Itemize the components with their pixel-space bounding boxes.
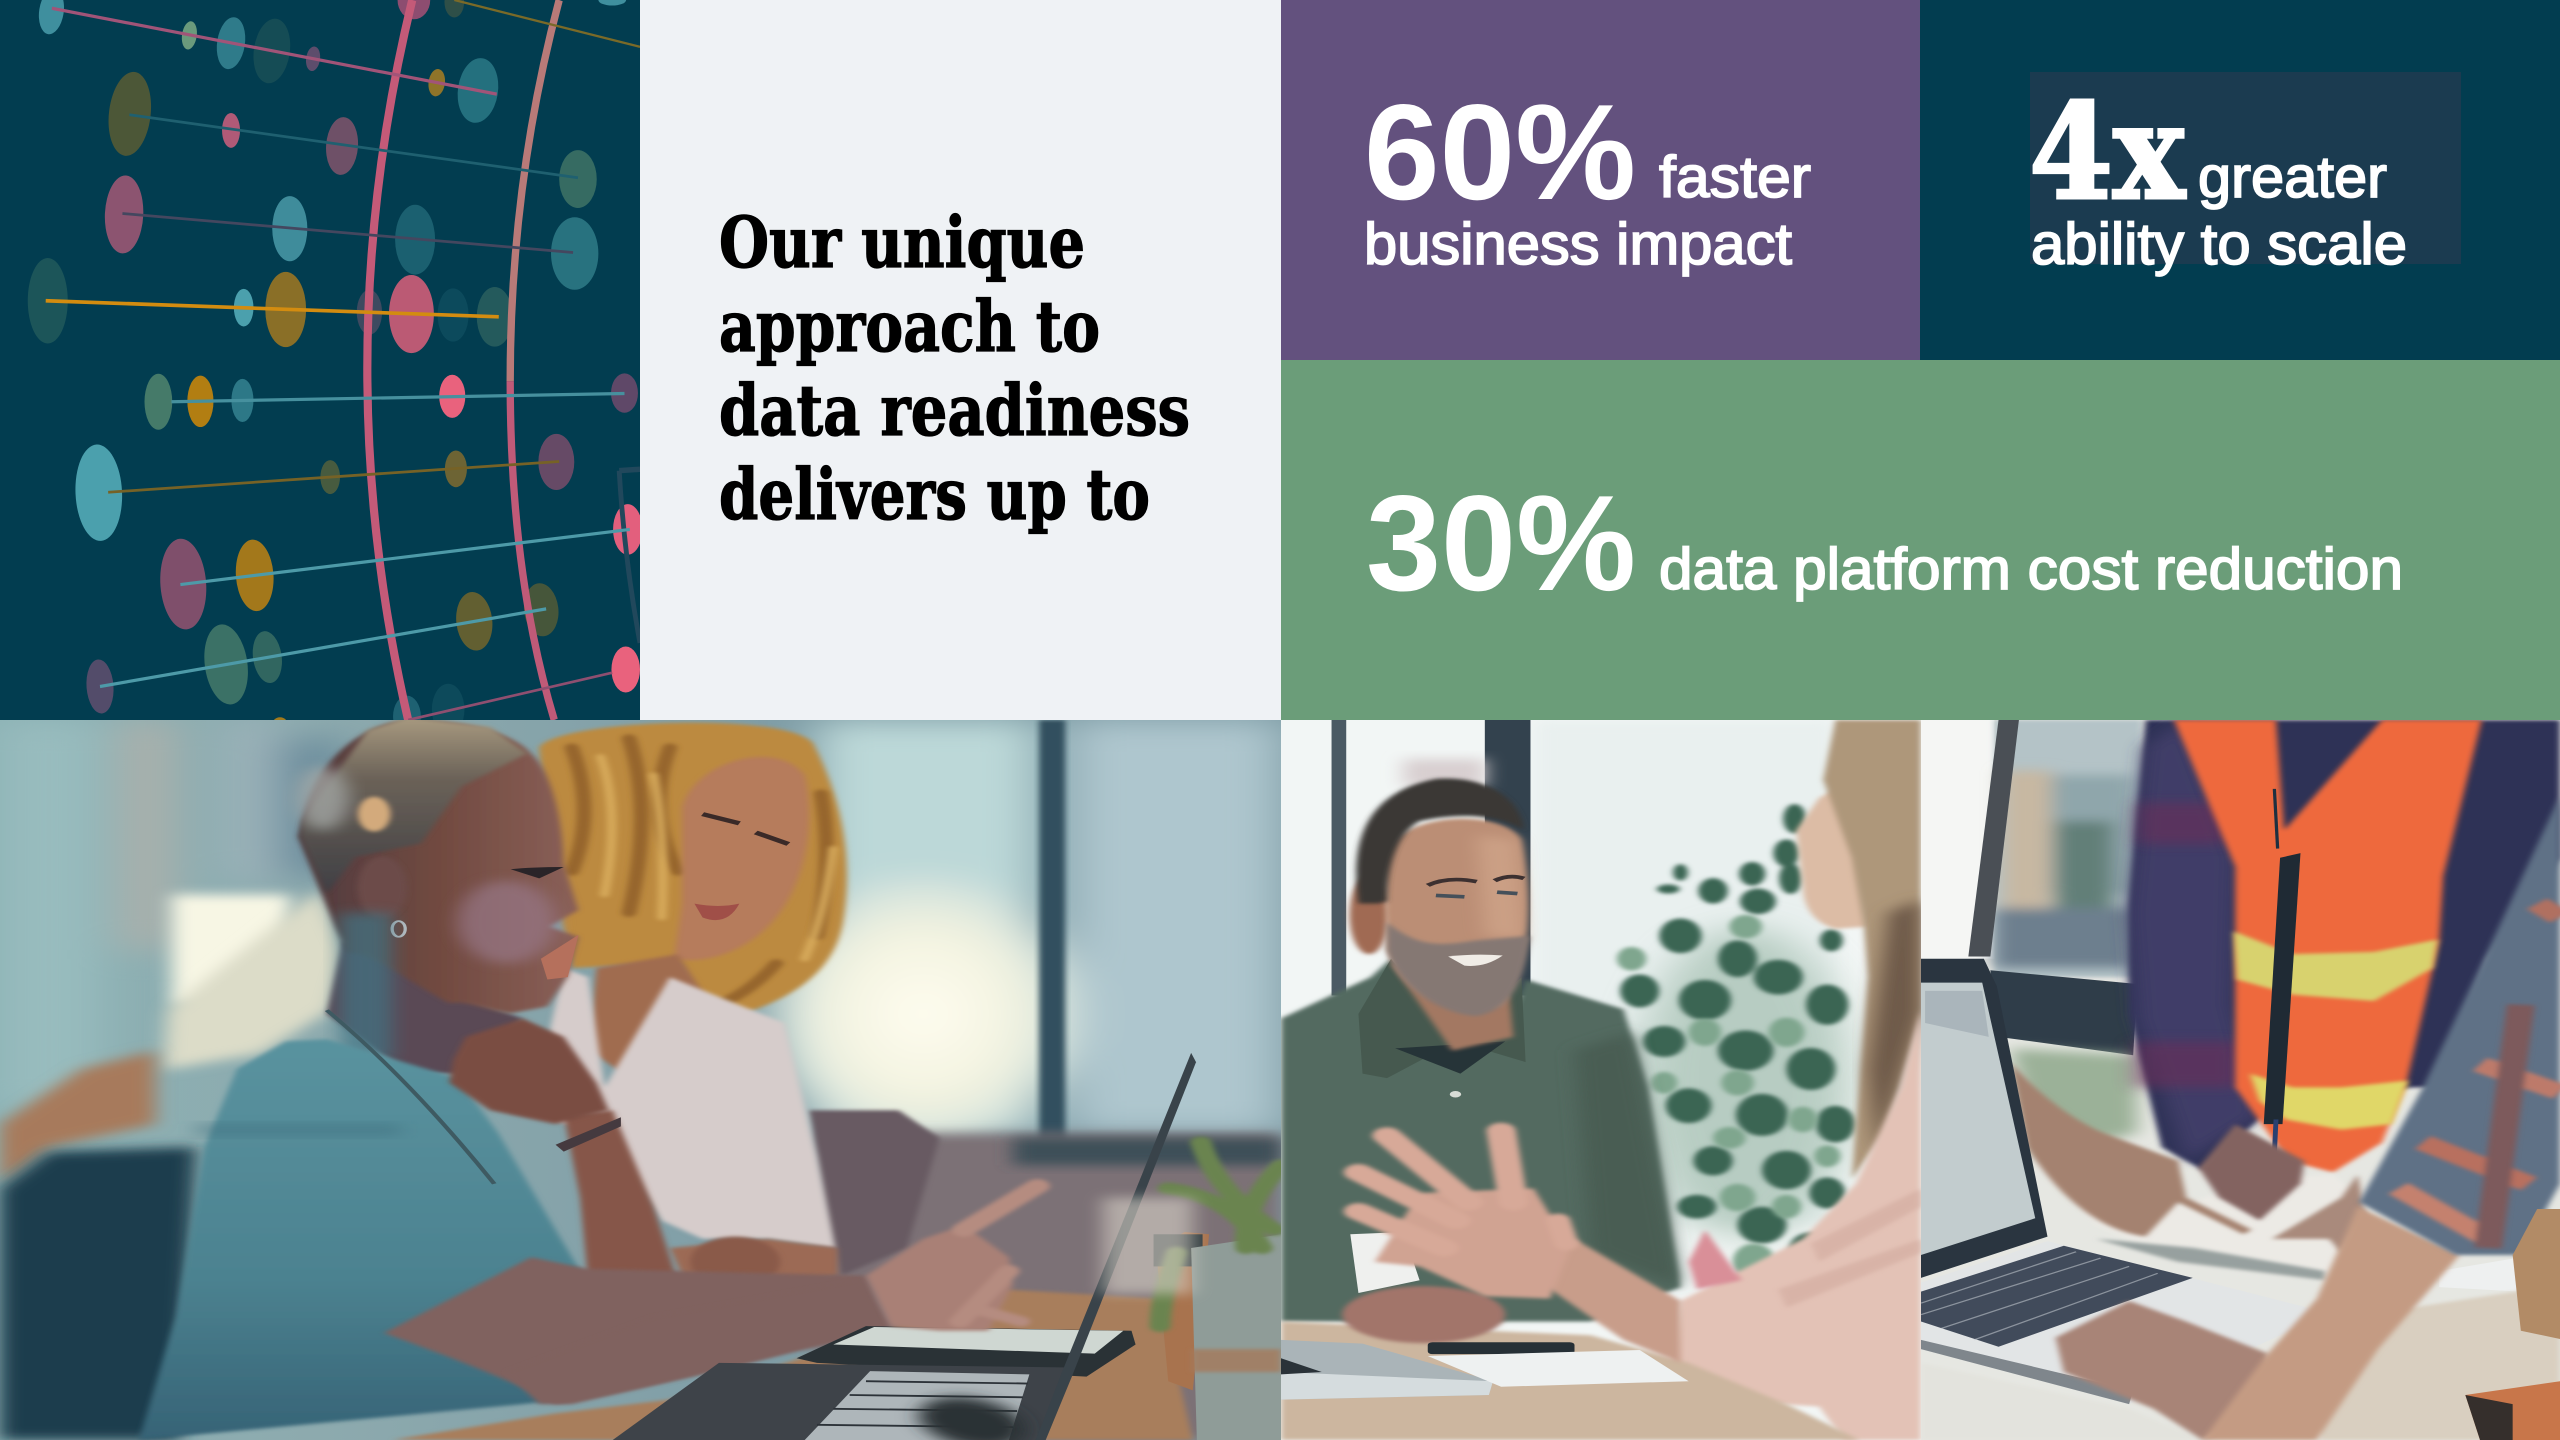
heading: Our unique	[719, 201, 1085, 284]
notebook	[2035, 1161, 2366, 1280]
stat label: faster business impact: faster	[1659, 145, 1811, 210]
heading	[719, 201, 1190, 536]
window sill	[1990, 970, 2137, 1055]
stat label: faster business impact: business impact	[1364, 212, 1792, 277]
plaid sleeve	[2359, 796, 2560, 1255]
plant pot	[1191, 1234, 1281, 1440]
woman 1: lifted arm and hand	[564, 1110, 678, 1282]
woman 1: hair	[301, 717, 527, 894]
woman 1: pointing arm	[384, 1257, 886, 1404]
plant	[1617, 804, 1855, 1280]
keyboard	[1921, 1246, 2193, 1347]
woman 1: ear	[358, 856, 407, 919]
woman: gesturing hand	[1358, 1131, 1570, 1299]
woman 2: neck	[588, 954, 711, 1087]
heading: delivers up to	[719, 453, 1150, 536]
man: hair	[1356, 778, 1524, 904]
worker: sweater	[2129, 720, 2560, 1170]
stat: 4x: 4x	[2029, 75, 2186, 230]
writing hand	[2198, 1124, 2305, 1221]
man: ear	[1349, 876, 1389, 954]
tablet	[797, 1326, 1136, 1377]
man: eyes and brows	[1428, 877, 1524, 885]
mug	[1350, 1232, 1420, 1293]
reflective band lower	[2250, 1074, 2408, 1130]
woman 1: neck	[327, 940, 523, 1074]
woman 1: t-shirt	[139, 1039, 588, 1440]
dark chair	[0, 1147, 196, 1440]
safety vest	[2174, 720, 2482, 1172]
panel: 60% faster business impact	[1281, 0, 1920, 360]
wooden house	[2513, 1209, 2560, 1339]
woman 1: eye and lips	[511, 867, 564, 878]
man: beard	[1387, 922, 1530, 1016]
woman: profile	[1796, 780, 1868, 929]
woman 2: blouse	[531, 968, 835, 1248]
necklace	[327, 1010, 494, 1184]
pointing hand	[866, 1186, 1038, 1331]
papers	[1428, 1350, 1689, 1387]
panel: dot and line data pattern	[0, 0, 640, 720]
table	[392, 1289, 1193, 1440]
laptop base	[1921, 1241, 2317, 1404]
heading: approach to	[719, 285, 1100, 368]
pen	[2243, 1119, 2276, 1230]
photo: two women at a laptop	[0, 720, 1281, 1440]
garden view	[2011, 1048, 2137, 1156]
chair back	[809, 1110, 940, 1276]
panel: 4x greater ability to scale	[1920, 0, 2560, 360]
panel: 30% data platform cost reduction	[1281, 360, 2560, 720]
woman: hair	[1823, 720, 1921, 1179]
zipper	[2264, 853, 2300, 1124]
man: lower hand	[1342, 1286, 1505, 1343]
laptop	[1281, 1340, 1493, 1400]
laptop lid	[1036, 1053, 1196, 1440]
woman 2: face	[674, 757, 809, 960]
stat label: data platform cost reduction: data platform cost reduction	[1659, 537, 2403, 602]
stat: 30%: 30%	[1366, 467, 1636, 619]
laptop screen	[1921, 959, 2047, 1278]
orange block	[2465, 1381, 2560, 1440]
woman: arm	[1517, 1239, 1680, 1363]
plant	[1160, 1142, 1281, 1326]
stat: 60%: 60%	[1364, 76, 1636, 228]
table bottom	[1921, 1363, 2203, 1440]
table	[1281, 1322, 1860, 1440]
stat label: faster business impact	[1364, 145, 1811, 277]
woman 2: forearm and hand	[670, 1239, 837, 1285]
photo: workers with laptop and plans	[1921, 720, 2560, 1440]
left arm	[2011, 1062, 2252, 1237]
stat label: greater ability to scale: greater	[2198, 145, 2387, 210]
photo: man smiling in meeting	[1281, 720, 1921, 1440]
woman 1: head	[298, 720, 578, 1013]
stat label: greater ability to scale	[2031, 145, 2407, 277]
coffee cup	[1156, 1232, 1209, 1390]
bright patch	[172, 894, 290, 1005]
orange arm behind	[0, 1051, 155, 1184]
woman 2: hair	[539, 723, 847, 1023]
man: face	[1383, 819, 1528, 1009]
pointing arm over table	[507, 1280, 890, 1404]
man: shirt	[1281, 959, 1680, 1322]
panel: heading background	[640, 0, 1281, 720]
typing hand	[2056, 1301, 2272, 1440]
right forearm	[2203, 1207, 2460, 1440]
reflective band upper	[2234, 931, 2438, 1001]
heading: data readiness	[719, 369, 1190, 452]
teal reflection band	[339, 913, 392, 1060]
stat label: greater ability to scale: ability to scale	[2031, 212, 2407, 277]
woman: blouse	[1674, 1009, 1921, 1440]
man: neck	[1391, 963, 1513, 1051]
laptop base	[613, 1363, 1070, 1440]
right hand on plan	[2272, 1175, 2366, 1253]
cream blurred reflection	[163, 890, 347, 1070]
